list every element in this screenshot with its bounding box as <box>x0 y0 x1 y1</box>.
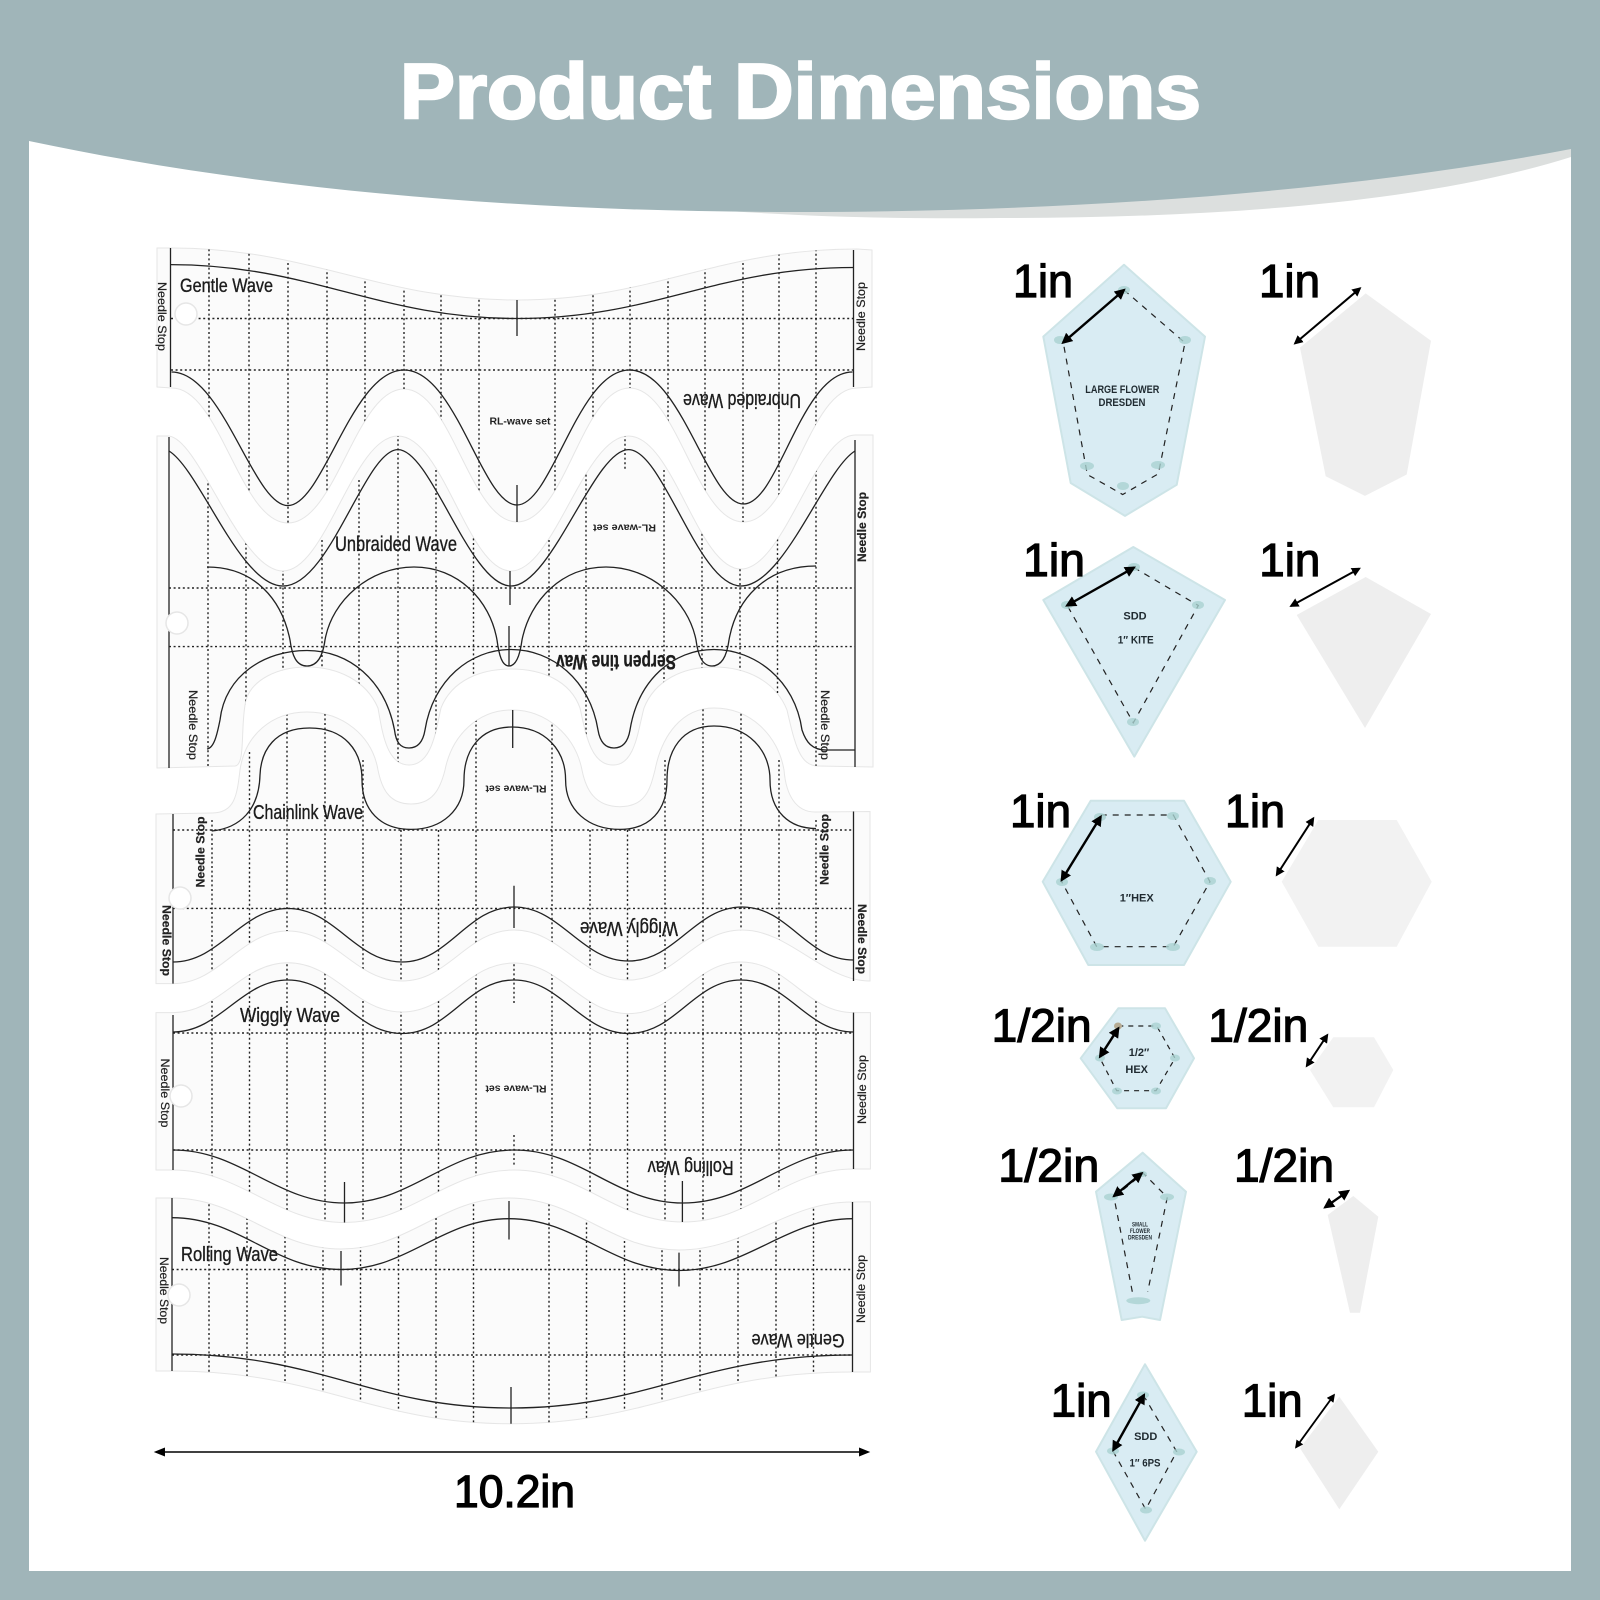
arrow: silhouette side <box>1325 1191 1348 1207</box>
template: half inch hexagon, clear <box>1081 1008 1194 1108</box>
label: SMALL FLOWER DRESDEN: FLOWER <box>1130 1228 1150 1235</box>
template: hexagon silhouette <box>1282 820 1432 947</box>
arrow: silhouette side <box>1291 569 1359 606</box>
arrow: overall width <box>156 1451 868 1453</box>
label: LARGE FLOWER DRESDEN <box>1085 384 1159 409</box>
label: half inch HEX <box>1125 1047 1150 1076</box>
dimension: 1/2in: 1/2in <box>1208 1000 1308 1052</box>
label: Needle Stop lower right: Needle Stop <box>855 904 869 974</box>
label: SDD 1 inch KITE: 1″ KITE <box>1118 634 1154 646</box>
template: large flower dresden, clear <box>1043 265 1205 516</box>
dimension: 1/2in: 1/2in <box>1234 1140 1334 1192</box>
dimension: 1/2in: 1/2in <box>992 1000 1092 1052</box>
label: RL-wave set: RL-wave set <box>490 416 551 428</box>
dimension: 1in: 1in <box>1051 1375 1112 1427</box>
label: LARGE FLOWER DRESDEN: DRESDEN <box>1098 397 1146 409</box>
label: Wiggly Wave: Wiggly Wave <box>240 1005 340 1027</box>
arrow: side length <box>1100 1028 1118 1057</box>
dimension: 1in: 1in <box>1259 534 1320 586</box>
template: 1 inch kite, clear <box>1043 547 1225 757</box>
label: Rolling Wave: Rolling Wave <box>181 1244 278 1266</box>
arrow: silhouette side <box>1295 288 1360 343</box>
label: SDD 1 inch 6PS: SDD <box>1134 1431 1157 1443</box>
label: SDD 1 inch 6PS <box>1130 1431 1160 1470</box>
panel: wave ruler 4 (Wiggly / Rolling) <box>156 955 870 1230</box>
label: Needle Stop inner left: Needle Stop <box>194 816 208 888</box>
label: LARGE FLOWER DRESDEN: LARGE FLOWER <box>1085 384 1159 396</box>
header swoosh shadow <box>700 145 1571 218</box>
label: SMALL FLOWER DRESDEN: SMALL <box>1132 1222 1148 1228</box>
dimension: 10.2in: 10.2in <box>454 1466 575 1517</box>
dimension: 1in: 1in <box>1259 255 1320 307</box>
dimension: 1in: 1in <box>1023 534 1085 586</box>
label: Needle Stop right: Needle Stop <box>854 1255 868 1323</box>
label: half inch HEX: 1/2″ <box>1129 1047 1150 1059</box>
panel: wave ruler 5 (Rolling / Gentle) <box>156 1195 870 1430</box>
arrow: side length <box>1067 568 1134 606</box>
template: small dresden silhouette <box>1328 1196 1378 1313</box>
template: 1 inch hexagon, clear <box>1043 801 1231 965</box>
arrow: silhouette side <box>1307 1035 1327 1066</box>
label: Needle Stop inner right: Needle Stop <box>817 814 831 885</box>
arrow: side length <box>1113 1395 1144 1450</box>
label: Gentle Wave: Gentle Wave <box>180 276 273 297</box>
panel: wave ruler 3 (Chainlink / Wiggly) <box>156 700 870 990</box>
arrow: side length <box>1114 1173 1142 1196</box>
panel: wave ruler 2 (Unbraided / Serpentine) <box>157 430 873 770</box>
header curved band <box>0 0 1600 212</box>
label: 1 inch HEX: 1″HEX <box>1120 892 1154 904</box>
label: Needle Stop left: Needle Stop <box>157 1257 171 1324</box>
panel: wave ruler 1 (Gentle / Unbraided) <box>155 240 872 530</box>
template: large flower dresden, silhouette <box>1300 293 1431 496</box>
template: kite silhouette <box>1297 577 1431 728</box>
title: Product Dimensions <box>400 47 1201 135</box>
label: Needle Stop lower left: Needle Stop <box>160 905 174 976</box>
label: SDD 1 inch KITE <box>1118 610 1154 646</box>
label: Needle Stop left: Needle Stop <box>155 282 169 351</box>
label: Needle Stop right upper: Needle Stop <box>855 492 869 562</box>
dimension: 1/2in: 1/2in <box>998 1140 1099 1192</box>
arrow: side length <box>1062 817 1101 880</box>
label: Rolling Wave inverted: Rolling Wav <box>648 1156 734 1178</box>
arrow: side length <box>1063 290 1124 343</box>
label: Needle Stop left: Needle Stop <box>158 1058 172 1128</box>
template: small flower dresden, clear <box>1096 1153 1186 1320</box>
label: SMALL FLOWER DRESDEN: DRESDEN <box>1128 1234 1152 1242</box>
label: SDD 1 inch 6PS: 1″ 6PS <box>1130 1458 1160 1470</box>
label: Wiggly Wave inverted: Wiggly Wave <box>580 917 678 939</box>
label: RL-wave set inverted: RL-wave set <box>485 1082 546 1093</box>
label: SMALL FLOWER DRESDEN <box>1128 1222 1152 1242</box>
label: Needle Stop left lower: Needle Stop <box>186 690 200 760</box>
dimension: 1in: 1in <box>1013 255 1073 307</box>
label: Chainlink Wave: Chainlink Wave <box>253 802 363 824</box>
template: half hexagon silhouette <box>1310 1037 1393 1107</box>
dimension: 1in: 1in <box>1242 1375 1303 1427</box>
dimension: 1in: 1in <box>1225 785 1285 837</box>
label: Needle Stop right: Needle Stop <box>854 282 868 351</box>
label: Gentle Wave inverted: Gentle Wave <box>752 1329 844 1350</box>
label: Unbraided Wave inverted: Unbraided Wave <box>683 389 801 411</box>
label: RL-wave set inverted: RL-wave set <box>592 522 656 532</box>
label: RL-wave set inverted: RL-wave set <box>485 782 546 793</box>
template: diamond silhouette <box>1300 1397 1378 1509</box>
label: SDD 1 inch KITE: SDD <box>1123 610 1147 622</box>
dimension: 1in: 1in <box>1010 785 1071 837</box>
label: Unbraided Wave: Unbraided Wave <box>335 533 457 556</box>
label: half inch HEX: HEX <box>1125 1064 1149 1076</box>
arrow: silhouette side <box>1277 818 1313 875</box>
arrow: silhouette side <box>1296 1395 1334 1447</box>
template: 6-point star diamond, clear <box>1096 1364 1197 1541</box>
label: Serpentine Wave inverted: Serpen tine Wav <box>556 650 676 673</box>
label: Needle Stop right lower: Needle Stop <box>818 690 832 760</box>
label: Needle Stop right: Needle Stop <box>855 1055 869 1124</box>
